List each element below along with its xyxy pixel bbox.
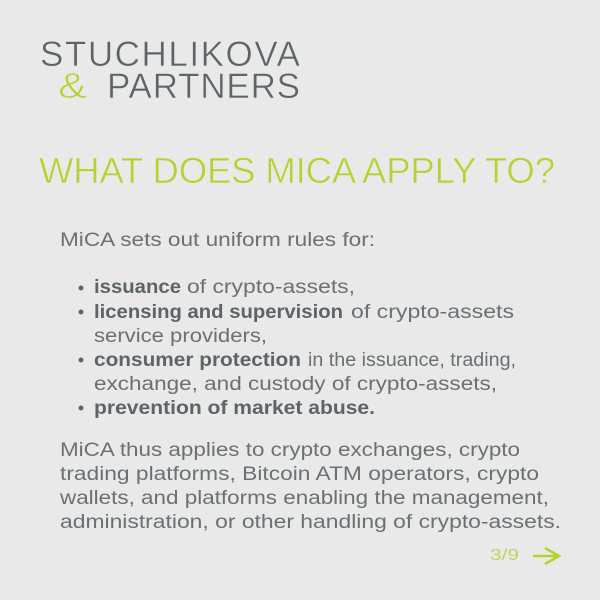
- bullet list: issuance: [94, 277, 181, 298]
- bullet list: [78, 277, 516, 419]
- logo ampersand: &: [58, 65, 87, 106]
- title: WHAT DOES MICA APPLY TO?: [39, 150, 555, 191]
- bullet list: of crypto-assets,: [187, 277, 355, 298]
- icon: arrow: [533, 548, 559, 564]
- intro text: MiCA sets out uniform rules for:: [60, 230, 375, 251]
- bullet list: service providers,: [94, 326, 267, 347]
- bullet list: of crypto-assets: [351, 302, 514, 323]
- bullet list: in the issuance, trading,: [308, 350, 516, 371]
- bullet list: consumer protection: [94, 350, 301, 371]
- page number: 3/9: [490, 547, 519, 564]
- closing paragraph: wallets, and platforms enabling the management,: [59, 488, 549, 509]
- bullet list: exchange, and custody of crypto-assets,: [94, 374, 497, 395]
- closing paragraph: MiCA thus applies to crypto exchanges, crypto: [60, 440, 520, 461]
- closing paragraph: trading platforms, Bitcoin ATM operators, crypto: [60, 464, 539, 485]
- closing paragraph: [59, 440, 561, 533]
- bullet list: licensing and supervision: [94, 302, 343, 323]
- closing paragraph: administration, or other handling of crypto-assets.: [60, 512, 561, 533]
- logo: [40, 35, 301, 106]
- logo: PARTNERS: [107, 67, 300, 106]
- logo: STUCHLIKOVA: [40, 35, 301, 74]
- bullet list: prevention of market abuse.: [94, 398, 375, 419]
